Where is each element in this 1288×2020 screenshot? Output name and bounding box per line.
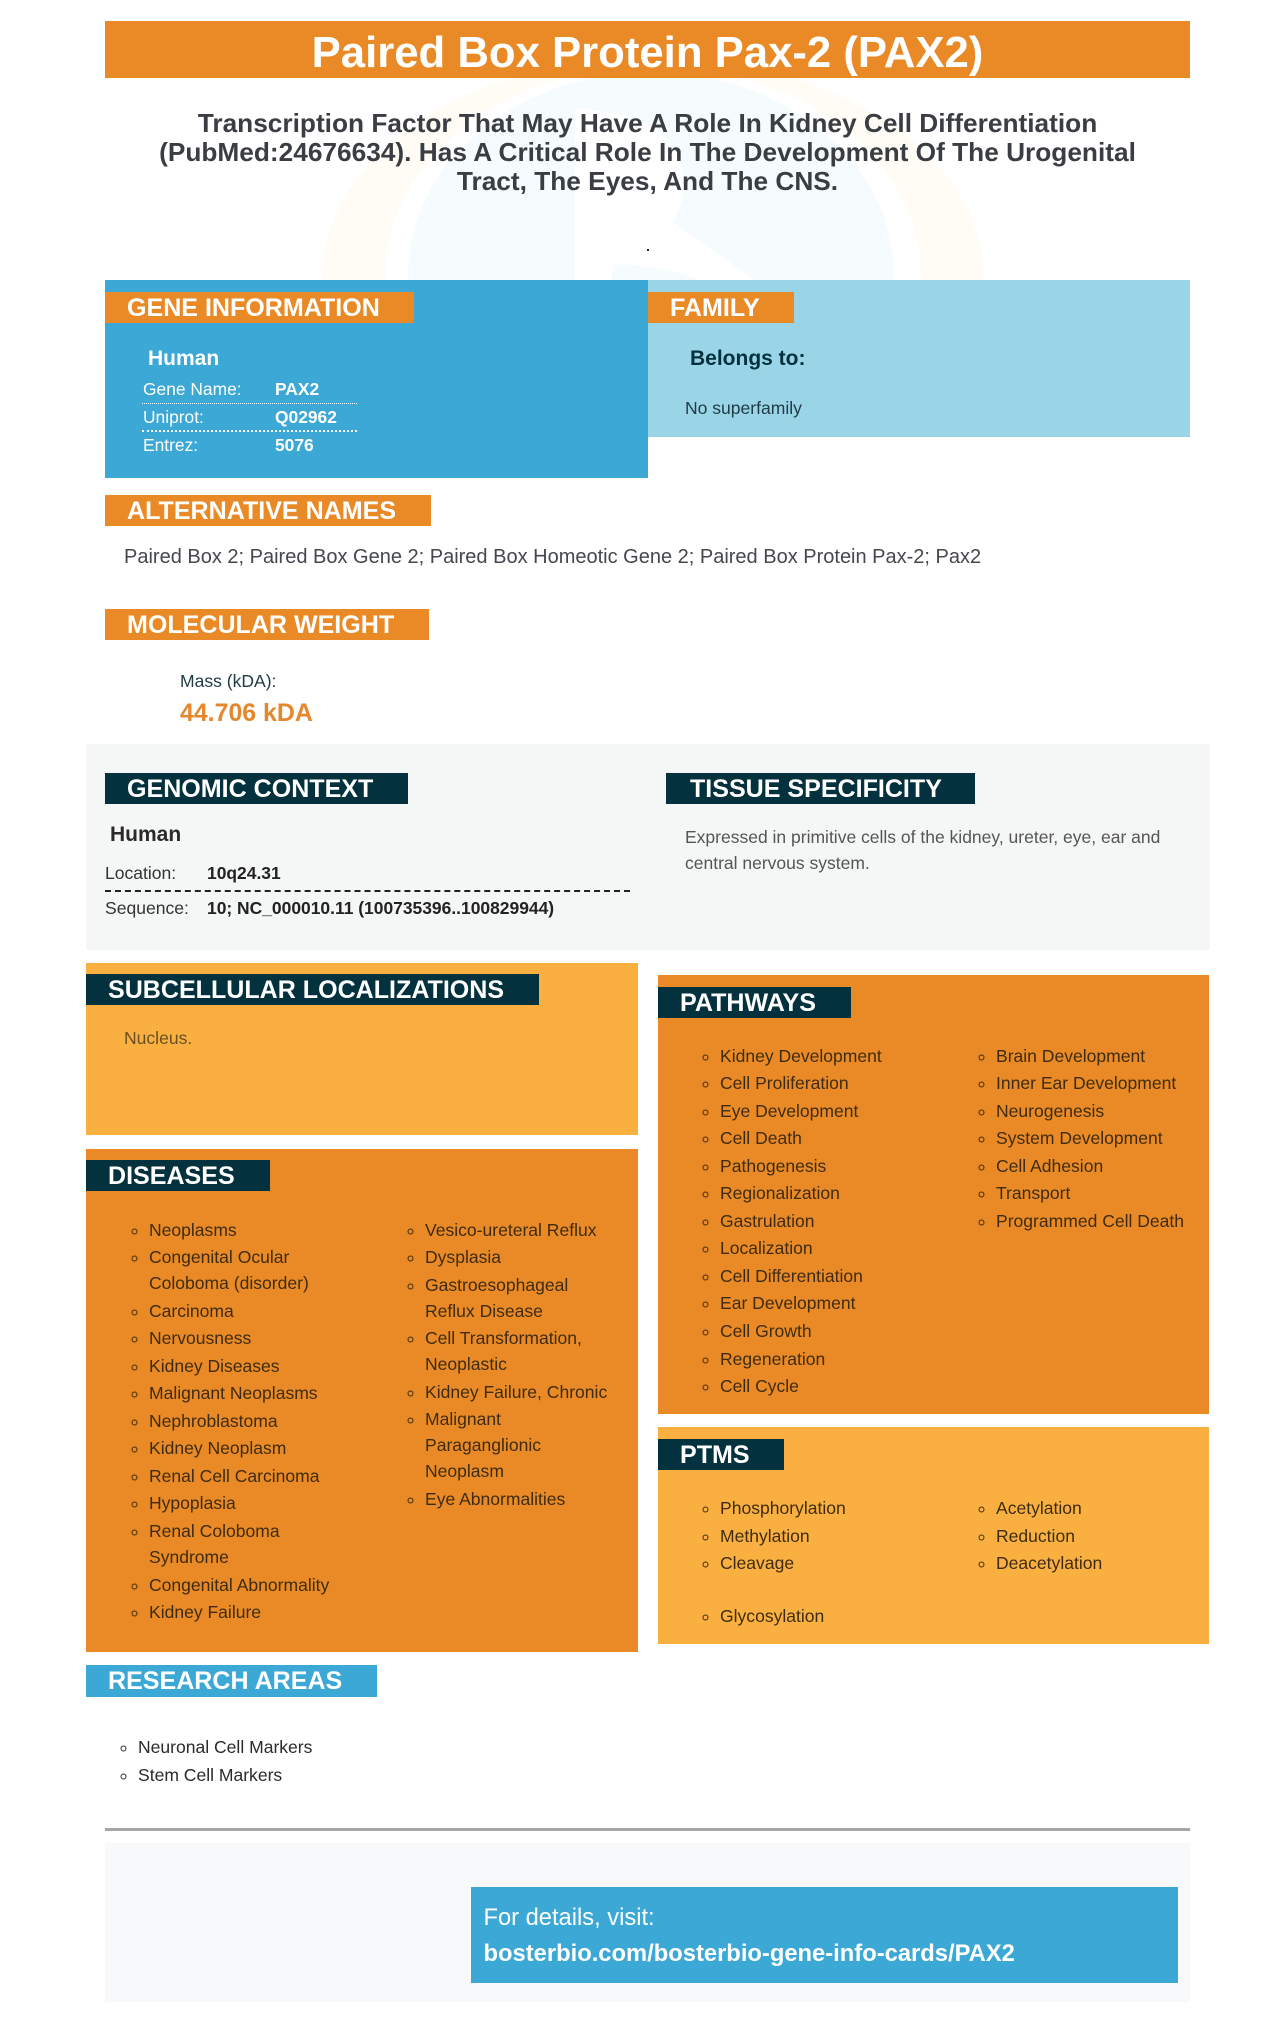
pathways list column 2: [978, 1046, 1184, 1231]
entrez row: 5076: [275, 435, 314, 455]
diseases list column 1: Hypoplasia: [149, 1493, 236, 1513]
heading: family: FAMILY: [670, 294, 760, 322]
pathways list column 2: Programmed Cell Death: [996, 1211, 1184, 1231]
pathways list column 2: Brain Development: [996, 1046, 1145, 1066]
heading: subcellular localizations: SUBCELLULAR LOCALIZATIONS: [108, 976, 504, 1004]
diseases list column 1: Renal Cell Carcinoma: [149, 1466, 320, 1486]
panel: ptms: [658, 1427, 1209, 1644]
sequence row: 10; NC_000010.11 (100735396..100829944): [207, 898, 554, 918]
diseases list column 2: Cell Transformation, Neoplastic: [425, 1328, 582, 1374]
heading: gene information: GENE INFORMATION: [127, 294, 380, 322]
diseases list column 2: Vesico-ureteral Reflux: [425, 1220, 596, 1240]
title banner: [105, 21, 1190, 78]
panel: gene information: [105, 280, 648, 478]
subtitle description: Tract, The Eyes, And The CNS.: [457, 166, 838, 196]
pathways list column 1: Kidney Development: [720, 1046, 882, 1066]
subtitle description: (PubMed:24676634). Has A Critical Role In The Development Of The Urogenital: [159, 136, 1136, 166]
ptms list column 1: Methylation: [720, 1526, 810, 1546]
diseases list column 1: Malignant Neoplasms: [149, 1383, 318, 1403]
pathways list column 2: Cell Adhesion: [996, 1156, 1103, 1176]
research areas list: [120, 1737, 312, 1785]
heading: pathways: [658, 987, 851, 1018]
panel: subcellular localizations: [86, 963, 638, 1135]
pathways list column 1: Cell Proliferation: [720, 1073, 849, 1093]
heading: research areas: RESEARCH AREAS: [108, 1667, 342, 1695]
panel: diseases: [86, 1149, 638, 1652]
diseases list column 2: Gastroesophageal Reflux Disease: [425, 1275, 568, 1321]
pathways list column 1: Cell Cycle: [720, 1376, 799, 1396]
alternative names text: Paired Box 2; Paired Box Gene 2; Paired Box Homeotic Gene 2; Paired Box Protein Pax-2; Pax2: [124, 546, 981, 568]
heading: alternative names: ALTERNATIVE NAMES: [127, 497, 396, 525]
localization text: Nucleus.: [124, 1028, 192, 1048]
diseases list column 2: Malignant Paraganglionic Neoplasm: [425, 1409, 541, 1481]
pathways list column 2: Neurogenesis: [996, 1101, 1104, 1121]
diseases list column 1: Kidney Neoplasm: [149, 1438, 286, 1458]
research areas list: Stem Cell Markers: [138, 1765, 282, 1785]
callout: details link: [471, 1887, 1178, 1983]
subtitle description: [159, 108, 1136, 196]
heading: tissue specificity: TISSUE SPECIFICITY: [690, 775, 942, 803]
diseases list column 2: Dysplasia: [425, 1247, 501, 1267]
tissue specificity text: central nervous system.: [685, 853, 870, 873]
subtitle description: Transcription Factor That May Have A Role In Kidney Cell Differentiation: [198, 108, 1097, 138]
pathways list column 1: Cell Growth: [720, 1321, 812, 1341]
gene name row: Gene Name:: [143, 379, 242, 399]
ptms list column 2: Deacetylation: [996, 1553, 1102, 1573]
diseases list column 1: [132, 1220, 330, 1622]
diseases list column 1: Congenital Abnormality: [149, 1575, 329, 1595]
tissue specificity text: Expressed in primitive cells of the kidney, ureter, eye, ear and: [685, 827, 1160, 847]
heading: family: [648, 292, 794, 323]
ptms list column 1: Glycosylation: [720, 1606, 824, 1626]
pathways list column 2: System Development: [996, 1128, 1163, 1148]
panel: genomic context and tissue specificity: [86, 744, 1210, 950]
mass label: Mass (kDA):: [180, 671, 276, 691]
entrez row: Entrez:: [143, 435, 198, 455]
location row: 10q24.31: [207, 863, 281, 883]
background watermark logo: [323, 78, 983, 280]
tissue specificity text: [685, 827, 1160, 873]
molecular weight value: [180, 671, 313, 727]
small dot: [647, 249, 649, 251]
uniprot row: [143, 407, 337, 427]
species label: Human: [148, 347, 219, 370]
diseases list column 1: Renal Coloboma Syndrome: [149, 1521, 280, 1567]
panel: family: [648, 280, 1190, 437]
diseases list column 1: Kidney Diseases: [149, 1356, 280, 1376]
pathways list column 2: Inner Ear Development: [996, 1073, 1176, 1093]
location row: [105, 863, 281, 883]
ptms list column 2: [978, 1498, 1102, 1573]
diseases list column 2: Kidney Failure, Chronic: [425, 1382, 607, 1402]
pathways list column 1: Localization: [720, 1238, 813, 1258]
sequence row: Sequence:: [105, 898, 189, 918]
diseases list column 1: Neoplasms: [149, 1220, 237, 1240]
pathways list column 1: Ear Development: [720, 1293, 855, 1313]
pathways list column 1: Eye Development: [720, 1101, 858, 1121]
gene name row: PAX2: [275, 379, 319, 399]
belongs to label: Belongs to:: [690, 347, 806, 370]
panel: pathways: [658, 975, 1209, 1414]
ptms list column 2: Reduction: [996, 1526, 1075, 1546]
gene name row: [143, 379, 319, 399]
uniprot row: Q02962: [275, 407, 337, 427]
diseases list column 1: Congenital Ocular Coloboma (disorder): [149, 1247, 309, 1293]
pathways list column 1: Regeneration: [720, 1349, 825, 1369]
heading: genomic context: GENOMIC CONTEXT: [127, 775, 373, 803]
heading: diseases: [86, 1160, 270, 1191]
callout url: bosterbio.com/bosterbio-gene-info-cards/PAX2: [484, 1940, 1015, 1966]
callout label: For details, visit:: [484, 1904, 655, 1930]
research areas list: Neuronal Cell Markers: [138, 1737, 312, 1757]
ptms list column 1: Cleavage: [720, 1553, 794, 1573]
title banner: Paired Box Protein Pax-2 (PAX2): [312, 28, 983, 77]
pathways list column 1: Pathogenesis: [720, 1156, 826, 1176]
pathways list column 2: Transport: [996, 1183, 1070, 1203]
family value: No superfamily: [685, 398, 802, 418]
heading: pathways: PATHWAYS: [680, 989, 816, 1017]
diseases list column 1: Carcinoma: [149, 1301, 234, 1321]
pathways list column 1: [702, 1046, 882, 1396]
uniprot row: Uniprot:: [143, 407, 204, 427]
species label: Human: [110, 823, 181, 846]
heading: molecular weight: MOLECULAR WEIGHT: [127, 611, 394, 639]
pathways list column 1: Cell Death: [720, 1128, 802, 1148]
ptms list column 2: Acetylation: [996, 1498, 1082, 1518]
diseases list column 1: Nervousness: [149, 1328, 251, 1348]
diseases list column 2: Eye Abnormalities: [425, 1489, 565, 1509]
diseases list column 1: Kidney Failure: [149, 1602, 261, 1622]
pathways list column 1: Cell Differentiation: [720, 1266, 863, 1286]
mass value: 44.706 kDA: [180, 699, 313, 727]
panel: footer: [105, 1843, 1190, 2002]
heading: diseases: DISEASES: [108, 1162, 235, 1190]
pathways list column 1: Regionalization: [720, 1183, 840, 1203]
diseases list column 1: Nephroblastoma: [149, 1411, 278, 1431]
entrez row: [143, 435, 314, 455]
diseases list column 2: [408, 1220, 607, 1509]
ptms list column 1: Phosphorylation: [720, 1498, 846, 1518]
pathways list column 1: Gastrulation: [720, 1211, 815, 1231]
location row: Location:: [105, 863, 176, 883]
heading: ptms: [658, 1439, 784, 1470]
ptms list column 1: [702, 1498, 846, 1626]
heading: ptms: PTMS: [680, 1441, 750, 1469]
